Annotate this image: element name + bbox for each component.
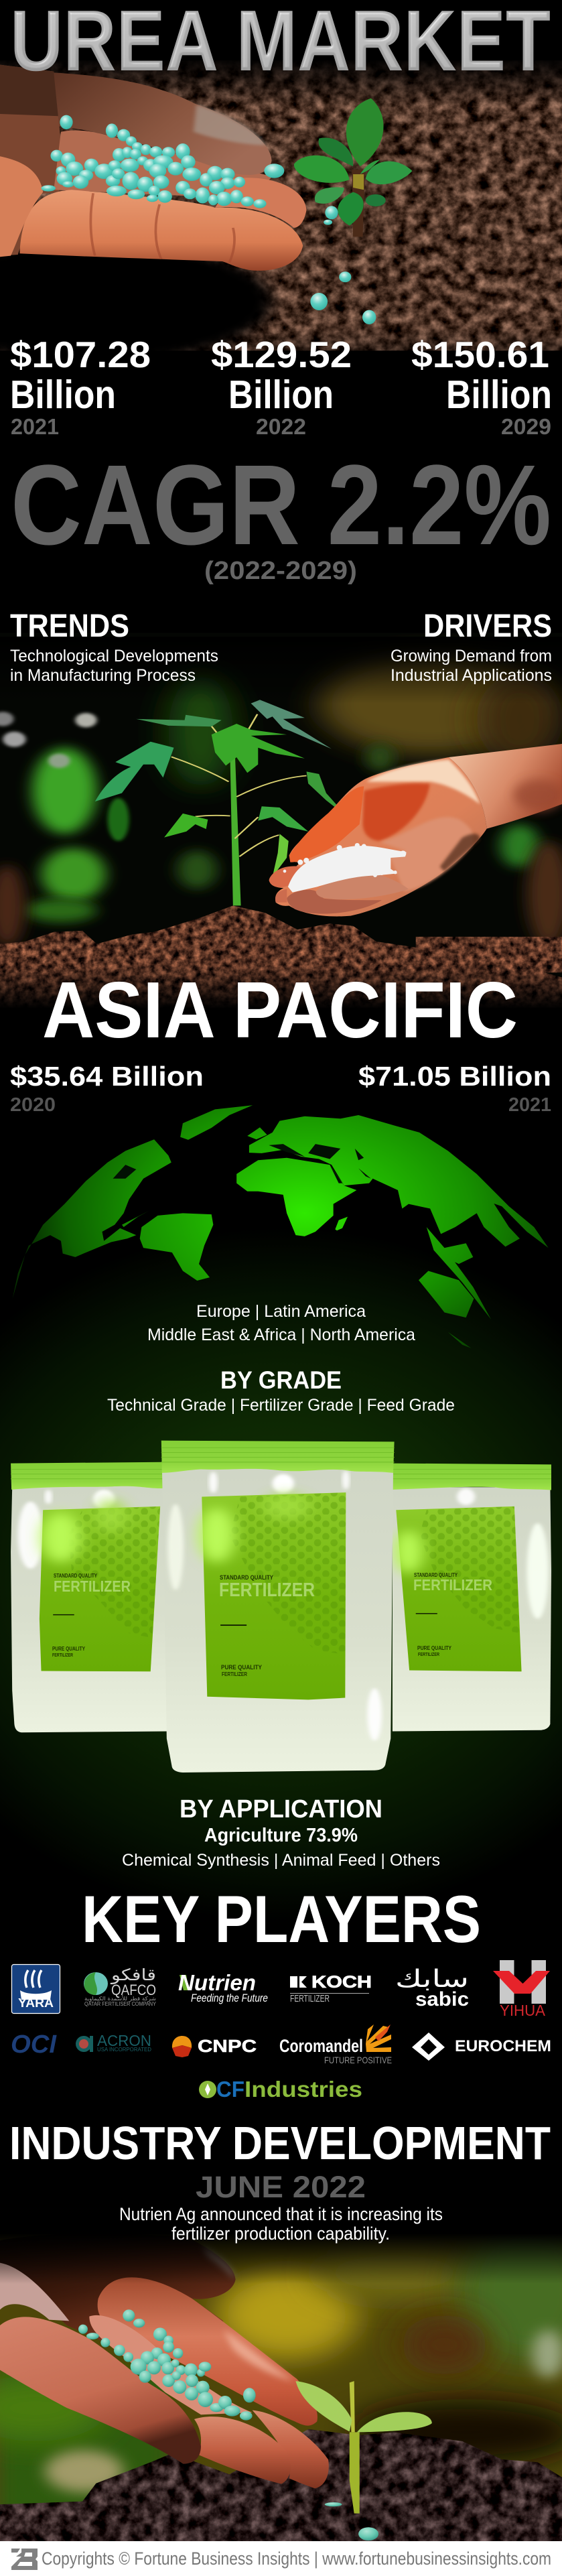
logo: Nutrien: Feeding the Future: [191, 1992, 268, 2004]
logo: CF Industries: CF: [216, 2077, 244, 2102]
bag label text: center: FERTILIZER: [222, 1671, 247, 1677]
stat: 2022: Billion: [228, 373, 334, 417]
Greenland: [180, 1105, 253, 1140]
logo: Nutrien: [178, 1970, 268, 2004]
logo: Coromandel: Coromandel: [279, 2036, 363, 2056]
bag label text: center: STANDARD QUALITY: [220, 1574, 273, 1581]
bag label text: left: STANDARD QUALITY: [54, 1573, 98, 1579]
regional stat: 2020: $35.64 Billion: [10, 1061, 204, 1092]
soil: [0, 60, 562, 350]
regions list: [147, 1302, 415, 1344]
logo: OCI: OCI: [11, 2031, 57, 2059]
trends block: [10, 608, 218, 685]
globe: [13, 1105, 549, 1348]
stat: 2022: $129.52: [211, 334, 352, 375]
hand: [0, 2234, 329, 2488]
heading: region: ASIA PACIFIC: [42, 966, 518, 1055]
bag label text: left: FERTILIZER: [54, 1577, 131, 1595]
North America: [13, 1139, 171, 1299]
soil: [0, 2429, 562, 2541]
by application: [122, 1795, 440, 1870]
logo: CF Industries: Industries: [244, 2077, 362, 2102]
bag label text: right: STANDARD QUALITY: [414, 1572, 458, 1578]
stat: 2029: [411, 334, 552, 439]
logo: Qafco: QATAR FERTILISER COMPANY: [84, 2001, 157, 2007]
background: dark green glow: [0, 1099, 562, 2037]
logo: CNPC: CNPC: [198, 2036, 257, 2056]
hand: [0, 65, 307, 271]
bag: left: [11, 1462, 168, 1732]
drivers block: Growing Demand from: [391, 647, 552, 665]
logo: Nutrien: Nutrien: [178, 1970, 256, 1995]
logo: Sabic: [395, 1966, 469, 2010]
hero bottom fade: [0, 328, 562, 389]
seedling: [294, 99, 412, 237]
regions list: Europe | Latin America: [196, 1302, 366, 1321]
stat: 2022: 2022: [256, 414, 306, 439]
logo: EuroChem: [412, 2033, 551, 2061]
development description: fertilizer production capability.: [171, 2224, 390, 2244]
logo: Yihua: YIHUA: [500, 2002, 546, 2019]
fertilizer pellets in hand: [42, 115, 284, 208]
logo: Koch: FERTILIZER: [290, 1993, 330, 2004]
logo: EuroChem: EUROCHEM: [455, 2037, 551, 2055]
seedling: [295, 2381, 432, 2514]
logo: CNPC: [172, 2036, 257, 2057]
by application: Agriculture 73.9%: [204, 1825, 358, 1846]
bag label text: right: FERTILIZER: [418, 1653, 439, 1657]
drivers block: [391, 608, 552, 685]
CAGR period: (2022-2029): [204, 557, 357, 585]
trends block: TRENDS: [10, 608, 129, 644]
bag: center: [161, 1441, 395, 1773]
footer: [0, 2541, 562, 2576]
development description: [119, 2204, 443, 2244]
blurred background: [0, 2219, 562, 2541]
Australia: [419, 1271, 474, 1317]
blurred background: [0, 633, 562, 992]
soil pellets: [325, 2502, 378, 2540]
Southeast Asia islands: [427, 1227, 491, 1319]
logo: Yihua: [493, 1960, 550, 2019]
South America: [140, 1213, 213, 1281]
logo: Qafco: شركة قطر للأسمدة الكيماوية: [84, 1995, 156, 2002]
bag label text: right: FERTILIZER: [413, 1576, 492, 1594]
falling pellets: [310, 206, 376, 324]
logo: Qafco: [84, 1966, 157, 2007]
trends block: Technological Developments: [10, 647, 218, 665]
by grade: Technical Grade | Fertilizer Grade | Feed Grade: [107, 1396, 455, 1415]
hand with urea: [269, 744, 562, 917]
bag label text: center: PURE QUALITY: [221, 1664, 262, 1671]
trends block: in Manufacturing Process: [10, 666, 196, 685]
bag label text: center: [219, 1574, 315, 1677]
logo: Koch: [290, 1973, 372, 2004]
soil mounds: [0, 905, 562, 1025]
by grade: BY GRADE: [220, 1366, 342, 1394]
fertilizer pellets in hand: [78, 2309, 256, 2421]
seedling: [95, 700, 348, 905]
drivers block: Industrial Applications: [391, 666, 552, 685]
logo: Sabic: سابك: [395, 1966, 469, 1993]
panel: hero photo: [0, 58, 562, 362]
bag label text: center: FERTILIZER: [219, 1580, 315, 1601]
regional stat: 2020: 2020: [10, 1094, 56, 1116]
logo: Yara: [12, 1965, 60, 2013]
bag label text: right: [413, 1572, 492, 1657]
logo: Acron: USA INCORPORATED: [97, 2047, 151, 2053]
Eurasia: [249, 1115, 549, 1248]
regional stat: 2021: [358, 1061, 551, 1116]
stat: 2029: $150.61: [411, 334, 549, 375]
logo: Qafco: QAFCO: [111, 1982, 156, 1998]
logo: Yara: YARA: [18, 1996, 54, 2010]
urea granules: [283, 843, 407, 893]
logo: Koch: KOCH: [311, 1973, 372, 1992]
logo: CF Industries: [199, 2077, 362, 2102]
bag label text: left: [52, 1573, 131, 1658]
bag: right: [393, 1464, 551, 1732]
drivers block: DRIVERS: [423, 608, 552, 644]
logo: Acron: ACRON: [97, 2032, 151, 2049]
top black area: [0, 2104, 562, 2234]
logo: Acron: [76, 2032, 151, 2053]
logo: Qafco: قافكو: [111, 1966, 156, 1984]
shadow below hand: [0, 241, 273, 362]
logo: Sabic: sabic: [415, 1988, 469, 2010]
fertilizer bags: [11, 1441, 551, 1773]
regions list: Middle East & Africa | North America: [147, 1326, 415, 1344]
Africa: [236, 1158, 356, 1236]
regional stat: 2021: $71.05 Billion: [358, 1061, 551, 1092]
stat: 2021: [10, 334, 151, 439]
by grade: [107, 1366, 455, 1415]
by application: Chemical Synthesis | Animal Feed | Others: [122, 1851, 440, 1870]
panel: plant photo: [0, 633, 562, 1025]
dark inland seas: [113, 1144, 371, 1183]
regional stat: 2020: [10, 1061, 204, 1116]
plant photo bottom fade: [0, 965, 562, 1009]
icon: Fortune Business Insights mark: [11, 2549, 38, 2570]
top and left fade: [0, 58, 562, 107]
heading: key players: KEY PLAYERS: [82, 1882, 481, 1956]
date: JUNE 2022: [196, 2170, 366, 2204]
development description: Nutrien Ag announced that it is increasing its: [119, 2204, 443, 2224]
stat: 2021: 2021: [11, 414, 59, 439]
development photo top fade: [0, 2234, 562, 2284]
stat: 2029: 2029: [501, 414, 551, 439]
logo: Coromandel: [279, 2024, 392, 2065]
stat: 2021: $107.28: [10, 334, 151, 375]
bag label text: left: PURE QUALITY: [52, 1646, 86, 1652]
plant photo top fade: [0, 637, 562, 704]
panel: development photo: [0, 2219, 562, 2541]
bag label text: left: FERTILIZER: [52, 1653, 73, 1658]
stat: 2021: Billion: [10, 373, 116, 417]
logo: Coromandel: FUTURE POSITIVE: [324, 2055, 392, 2065]
by application: BY APPLICATION: [180, 1795, 382, 1823]
stat: 2022: [211, 334, 352, 439]
bag label text: right: PURE QUALITY: [417, 1645, 452, 1651]
regional stat: 2021: 2021: [508, 1094, 551, 1116]
